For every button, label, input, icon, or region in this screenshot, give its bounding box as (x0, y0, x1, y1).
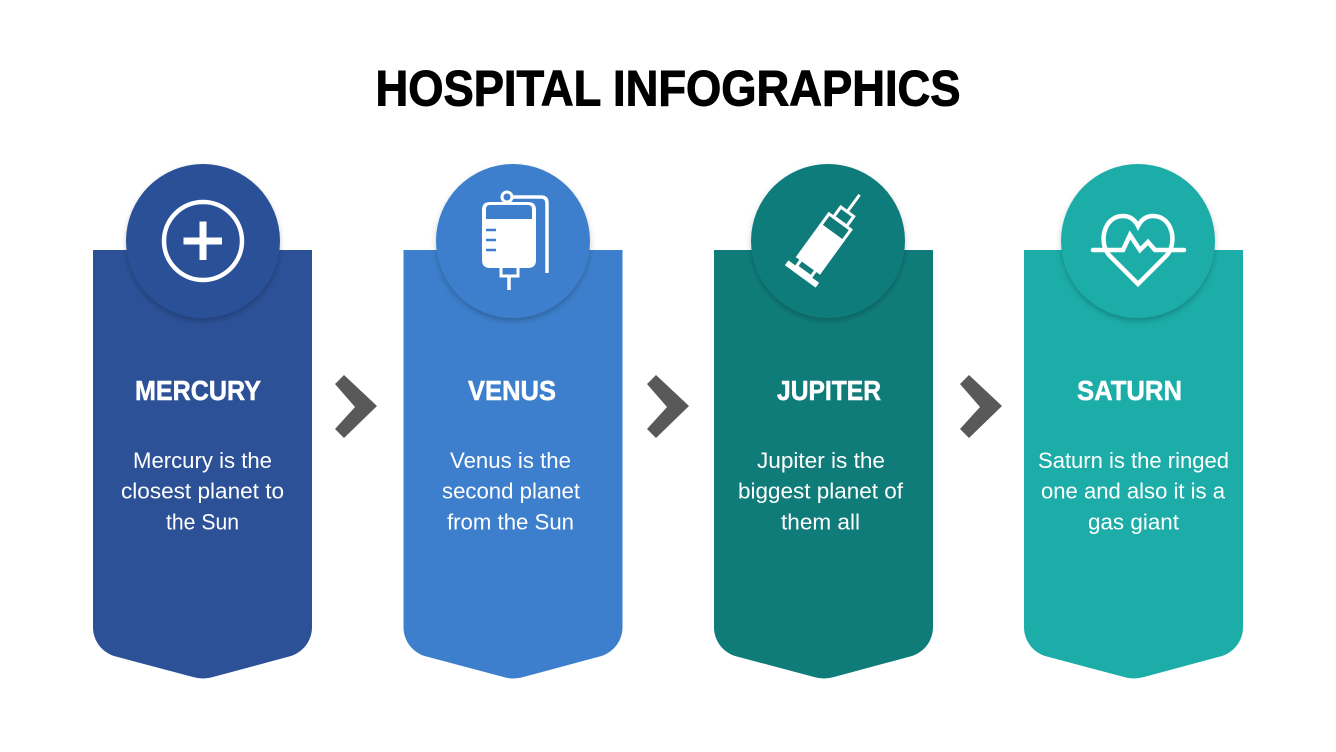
icon circle: Venus (436, 164, 590, 318)
arrow: Venus to Jupiter (647, 375, 689, 438)
icon circle: Saturn (1061, 164, 1215, 318)
heading: Mercury: MERCURY (135, 375, 261, 406)
text: Venus description (442, 448, 580, 534)
text: Saturn description: gas giant (1088, 510, 1179, 534)
panel: Jupiter (714, 164, 933, 678)
text: Mercury description: the Sun (166, 510, 239, 534)
text: Mercury description (121, 448, 284, 534)
panel shape: Jupiter (714, 250, 933, 678)
text: Saturn description: Saturn is the ringed (1038, 448, 1229, 473)
text: Venus description: Venus is the (450, 448, 571, 473)
panel: Saturn (1024, 164, 1243, 678)
heading: Jupiter: JUPITER (777, 375, 881, 406)
panel shape: Saturn (1024, 250, 1243, 678)
icon circle: Mercury (126, 164, 280, 318)
text: Mercury description: Mercury is the (133, 448, 272, 473)
text: Venus description: second planet (442, 478, 580, 504)
text: Jupiter description: them all (781, 510, 860, 534)
icon: IV drip bag (482, 192, 547, 290)
text: Mercury description: closest planet to (121, 478, 284, 504)
title: HOSPITAL INFOGRAPHICS (376, 60, 960, 116)
text: Venus description: from the Sun (447, 510, 574, 534)
text: Jupiter description: biggest planet of (738, 478, 904, 504)
icon: heart with pulse (1093, 216, 1184, 284)
icon: medical plus (164, 202, 242, 280)
arrow: Mercury to Venus (335, 375, 377, 438)
icon: syringe (785, 184, 875, 288)
text: Jupiter description: Jupiter is the (757, 448, 885, 473)
panel: Mercury (93, 164, 312, 678)
panel: Venus (404, 164, 622, 678)
text: Jupiter description (738, 448, 904, 534)
arrow: Jupiter to Saturn (960, 375, 1002, 438)
text: Saturn description (1038, 448, 1229, 534)
heading: Venus: VENUS (468, 375, 556, 406)
panel shape: Mercury (93, 250, 312, 678)
icon circle: Jupiter (751, 164, 905, 318)
heading: Saturn: SATURN (1077, 375, 1182, 406)
panel shape: Venus (404, 250, 622, 678)
text: Saturn description: one and also it is a (1041, 478, 1226, 504)
